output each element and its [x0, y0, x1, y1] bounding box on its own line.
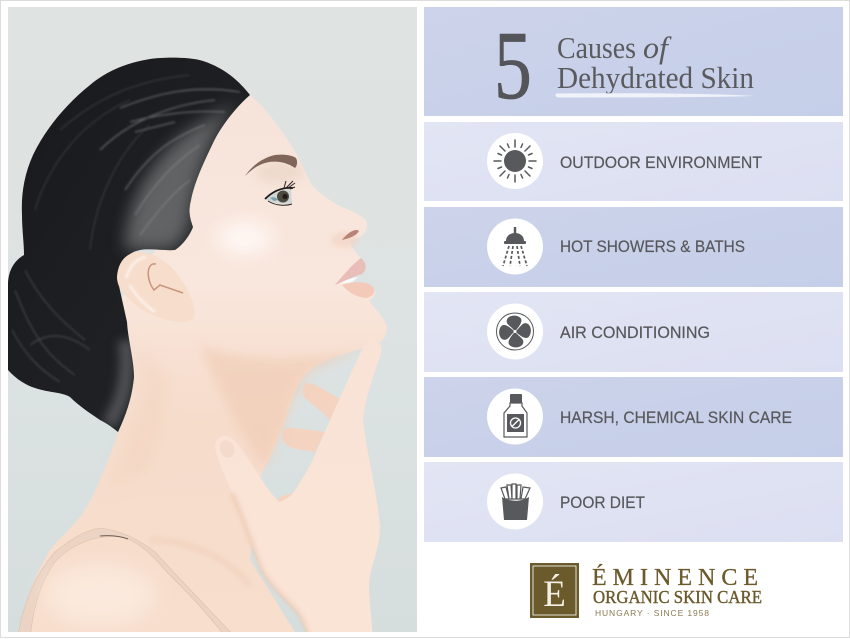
row: hot showers and baths	[424, 207, 843, 287]
label: HARSH, CHEMICAL SKIN CARE	[560, 409, 792, 427]
ear	[117, 252, 195, 322]
row: air conditioning	[424, 292, 843, 372]
title: Causes	[557, 30, 636, 65]
lips	[335, 258, 374, 298]
eyebrow	[245, 155, 297, 176]
logo mark: É	[543, 573, 566, 615]
brush underline	[555, 93, 755, 98]
nostril	[342, 230, 359, 240]
tagline: HUNGARY · SINCE 1958	[595, 608, 709, 618]
row: harsh chemical skin care	[424, 377, 843, 457]
eye	[265, 181, 295, 205]
header panel	[424, 7, 843, 119]
label: HOT SHOWERS & BATHS	[560, 238, 745, 256]
icon: shower	[503, 227, 527, 266]
title: of	[643, 30, 673, 65]
icon: bottle	[504, 394, 527, 437]
thumbnail	[220, 440, 234, 458]
brand descriptor: ORGANIC SKIN CARE	[593, 587, 762, 607]
logo mark	[530, 563, 579, 618]
row: poor diet	[424, 462, 843, 542]
top strap	[17, 528, 238, 639]
icon: fries	[501, 484, 530, 520]
body skin	[17, 95, 387, 639]
hair	[8, 58, 250, 432]
photo: woman in profile touching her neck	[8, 7, 417, 639]
icon: fan	[496, 313, 534, 350]
icon: sun	[494, 140, 536, 182]
label: POOR DIET	[560, 494, 645, 512]
skin shading	[150, 162, 358, 584]
back fingers	[278, 383, 342, 506]
row: outdoor environment	[424, 122, 843, 201]
title: Dehydrated Skin	[557, 60, 754, 95]
label: AIR CONDITIONING	[560, 324, 710, 342]
brand name: ÉMINENCE	[592, 565, 758, 591]
hand with index finger and thumb	[215, 342, 381, 639]
hand contour shadows	[232, 493, 310, 639]
title	[557, 30, 754, 95]
label: OUTDOOR ENVIRONMENT	[560, 154, 762, 172]
logo: Eminence Organic Skin Care	[530, 563, 762, 618]
big number 5: 5	[494, 11, 532, 119]
